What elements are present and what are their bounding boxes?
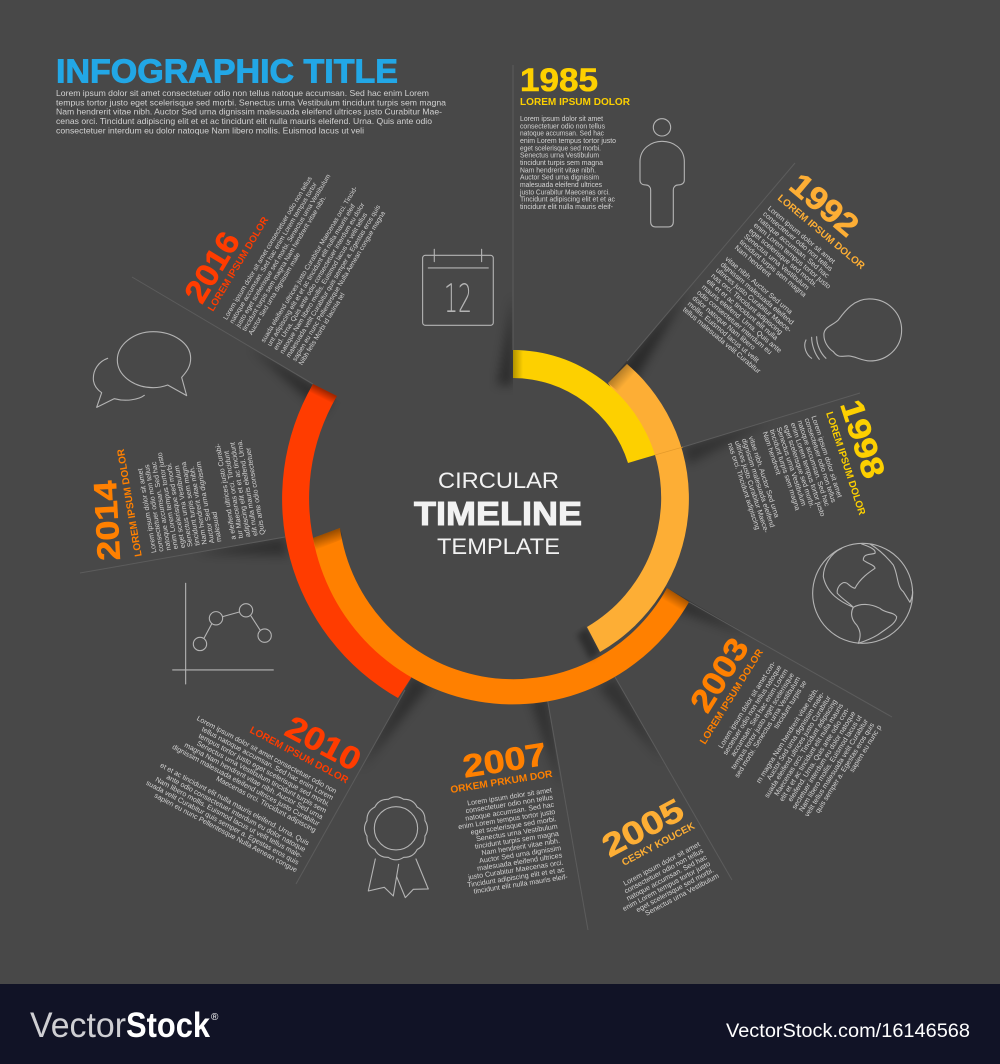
body text: enim Lorem tempus tortor justo	[520, 137, 616, 145]
body text: Lorem ipsum dolor sit amet	[810, 415, 844, 499]
panel: 1985	[519, 62, 631, 211]
body text: tincidunt turpis sem magna	[768, 428, 801, 512]
body text: natoque accumsan. Sed hac	[796, 419, 831, 508]
body text: tempus tortor justo eget scelerisque	[730, 671, 796, 771]
ring segment: red	[282, 384, 413, 698]
body text: eget scelerisque sed morbi.	[782, 424, 816, 509]
centre title	[414, 468, 582, 559]
body text: tellus malesuada velit Curabitur	[681, 306, 763, 376]
body text: velit tellus malesuada velit Curabitur	[803, 717, 870, 818]
body text: magna Nam hendrerit vitae nibh. Auctor Sed urna	[183, 741, 324, 821]
body text: enim Lorem tempus tortor justo	[752, 221, 832, 291]
centre title: TEMPLATE	[437, 534, 560, 559]
year 1998: 1998	[833, 395, 892, 482]
intro text: cenas orci. Tincidunt adipiscing elit et et ac tincidunt elit nulla mauris eleifend. Urna. Quis ante odio	[56, 116, 432, 126]
body text: dignissim malesuada eleifend ultrices justo Curabitur	[171, 743, 321, 828]
panel: 2010	[141, 663, 367, 876]
intro text: Nam hendrerit vitae nibh. Auctor Sed urna dignissim malesuada eleifend ultrices justo Curabitur Mae-	[56, 107, 442, 117]
body text: Lorem ipsum dolor sit amet	[766, 204, 837, 266]
panel: 2005	[585, 790, 723, 926]
ring segment: orange	[313, 528, 689, 704]
panel: 2007	[444, 735, 570, 897]
body text: malesuada velit Curabitur quis semper a. Egestas eros quis	[285, 204, 383, 359]
body text: malesuada eleifend ultrices	[477, 851, 563, 873]
body text: Nam hendrerit	[733, 244, 773, 279]
year 2005: 2005	[596, 791, 690, 864]
body text: tempus tortor justo eget scelerisque sed morbi.	[197, 732, 331, 808]
body text: Lorem ipsum dolor sit amet con-	[717, 659, 778, 750]
body text: accumsan. Sed hac enim Lorem	[729, 668, 790, 758]
body text: odio consectetuer interdum eu	[695, 289, 774, 356]
body text: Lorem ipsum dolor sit amet consectetuer odio non	[195, 715, 338, 795]
intro text: Lorem ipsum dolor sit amet consectetuer odio non tellus natoque accumsan. Sed hac enim Lorem	[56, 88, 429, 98]
footer logo	[30, 1006, 219, 1045]
body text: eget scelerisque sed morbi.	[520, 144, 601, 152]
body text: Nibh felis Morbi id lacinia tel	[298, 292, 347, 367]
label: LOREM IPSUM DOLOR	[775, 193, 867, 273]
label: LOREM IPSUM DOLOR	[248, 725, 351, 787]
body text: Lorem ipsum dolor sit amet	[520, 115, 603, 123]
body text: mollis. Euismod lacus ut velit	[686, 300, 760, 364]
label and body: LOREM IPSUM DOLOR	[116, 447, 145, 557]
body text: suada velit Curabitur quis semper a. Egestas eros quis	[145, 779, 300, 867]
body text: tincidunt elit nulla mauris eleif-	[520, 203, 614, 211]
body text: tincidunt elit nulla mauris eleif-	[473, 873, 569, 896]
body text: quis semper a. Egestas eros quis	[814, 721, 876, 815]
body text: consectetuer odio non tellus	[520, 122, 605, 130]
body text: enim Lorem tempus tortor justo	[621, 860, 712, 913]
body text: Maecenas orci. Tincidunt adipiscing	[215, 775, 317, 834]
paper fold shadows	[80, 65, 892, 930]
footer logo: ®	[211, 1012, 219, 1023]
body text: justo Curabitur Maecenas orci.	[467, 859, 564, 882]
label and body: Senectus urna Vestibulum	[173, 465, 194, 547]
body text: justo eget scelerisque sed morbi. Senectus urna Vestibulum	[235, 173, 333, 330]
body text: sectetuer odio non tellus natoque	[721, 664, 784, 757]
body text: end. Urna. Quis ante odio consectetuer interdum eu dolor	[273, 201, 367, 352]
body text: eget scelerisque sed morbi.	[635, 866, 715, 914]
body text: dolor natoque Nam libero	[691, 294, 757, 352]
footer logo: Stock	[126, 1006, 210, 1045]
icon: speech bubbles	[93, 332, 191, 407]
label and body: Nam hendrerit vitae nibh.	[188, 466, 209, 545]
icon: calendar: 12	[444, 277, 472, 322]
label: LOREM IPSUM DOLOR	[698, 647, 766, 747]
body text: vitae nibh. Auctor Sed urna	[724, 255, 794, 316]
body text: consectetuer odio non tellus	[761, 210, 834, 273]
body text: sectetuer interdum eu dolor natoque	[790, 710, 858, 811]
body text: m magna Nam hendrerit vitae nibh.	[755, 687, 820, 785]
label: LOREM IPSUM DOLOR	[823, 411, 867, 517]
intro text: tempus tortor justo eget scelerisque sed morbi. Senectus urna Vestibulum tincidunt turpis sem magna	[56, 97, 446, 107]
body text: ante odio consectetuer interdum eu dolor natoque	[165, 773, 307, 854]
panel: 1992	[681, 165, 890, 384]
body text: Lorem ipsum dolor sit amet	[622, 840, 701, 888]
body text: mauris eleifend. Urna. Quis ante	[700, 283, 783, 355]
label and body: adipiscing elit et et ac tincidunt	[229, 442, 252, 538]
year 1985: 1985	[520, 62, 598, 98]
body text: unt adipiscing elit et et ac tincidunt elit nulla mauris eleif	[266, 203, 357, 348]
body text: Senectus urna Vestibulum tincidunt turpis sem	[195, 739, 328, 815]
icon: person	[640, 119, 684, 227]
body text: Nam libero mollis. Euismod lacus ut velit tellus male-	[154, 776, 304, 860]
body text: vitae nibh. Auctor Sed urna	[747, 435, 781, 519]
label and body: consectetuer odio non tellus	[143, 463, 166, 552]
body text: consectetuer odio non tellus	[465, 793, 554, 815]
label: LOREM IPSUM DOLOR	[520, 97, 631, 108]
label and body: Quis ante odio consectetuer	[244, 446, 267, 535]
label and body: a eleifend ultrices justo Curabi-	[214, 442, 238, 540]
label: ORKEM PRKUM DOR	[450, 769, 554, 796]
body text: justo Curabitur Maecenas orci.	[519, 188, 610, 196]
body text: natoque accumsan. Sed hac	[465, 801, 555, 823]
centre title: CIRCULAR	[438, 468, 559, 493]
icon: calendar	[423, 249, 493, 325]
body text: Lorem ipsum dolor sit amet consectetuer odio non tellus	[222, 175, 314, 321]
body text: enim Lorem tempus tortor justo	[789, 422, 827, 518]
body text: Auctor Sed urna dignissim male-	[765, 690, 827, 782]
body text: eleifend. Urna. Quis ante odio con-	[786, 705, 852, 803]
body text: sapien eu nunc p	[848, 724, 883, 774]
circular ring	[282, 350, 689, 704]
body text: tincidunt turpis sem magna	[520, 159, 603, 167]
body text: tincidunt turpis sem magna	[474, 830, 559, 851]
body text: Auctor Sed urna dignissim male	[248, 252, 302, 336]
body text: ultrices justo Curabitur Maece-	[733, 440, 770, 534]
intro text: consectetuer interdum eu dolor natoque Nam libero mollis. Euismod lacus ut veli	[56, 125, 364, 135]
body text: Lorem ipsum dolor sit amet	[467, 786, 552, 808]
body text: tincidunt turpis se	[772, 679, 809, 730]
body text: suada eleifend ultrices justo Curabitur Maecenas orci. Tincid-	[260, 185, 359, 344]
body text: nas orci. Tincidunt adipiscing	[709, 272, 784, 336]
panel: 1998	[725, 395, 902, 549]
body text: Auctor Sed urna dignissim	[520, 174, 599, 182]
icon: globe	[813, 543, 913, 643]
body text: ultrices justo Curabitur Maece-	[714, 266, 793, 335]
body text: Senectus urna Vestibulum	[476, 822, 558, 843]
label and body: eget scelerisque sed morbi.	[165, 462, 187, 549]
body text: eget scelerisque sed morbi.	[470, 815, 557, 837]
body text: elit et et ac tincidunt elit nulla	[705, 277, 779, 342]
label: CESKY KOUCEK	[620, 821, 698, 869]
body text: malesuada eleifend ultrices	[520, 181, 602, 189]
body text: Nam libero mollis. Euismod lacus ut	[797, 714, 864, 813]
year 2010: 2010	[280, 709, 367, 778]
label and body: enim Lorem tempus tortor justo	[156, 452, 180, 550]
body text: tellus natoque accumsan. Sed hac enim Lorem	[200, 725, 335, 802]
icon: light bulb	[805, 299, 902, 361]
body text: natoque accumsan. Sed hac	[520, 130, 604, 138]
year 2016: 2016	[177, 225, 247, 309]
footer logo: Vector	[30, 1006, 126, 1045]
body text: Nam hendrerit vitae nibh.	[520, 166, 596, 174]
body text: et et ac tincidunt elit nulla mauris eleifend. Urna. Quis	[159, 762, 311, 847]
body text: natoque accumsan. Sed hac	[757, 216, 831, 280]
body text: elit et et ac tincidunt elit nulla mauris	[778, 702, 845, 803]
body text: Senectus urna Vestibulum	[775, 426, 808, 507]
body text: sed morbi. Senectus urna Vestibulum	[733, 675, 802, 779]
body text: sapien eu nunc Pellentesque Nulla Aenean congue magna	[292, 210, 387, 363]
body text: tincidunt turpis sem magna	[738, 238, 808, 299]
icon: line chart	[173, 583, 273, 684]
body text: suada eleifend ultrices justo Curabitur	[763, 694, 833, 799]
year 1992: 1992	[783, 166, 866, 244]
body text: natoque accumsan. Sed hac	[625, 853, 709, 903]
panel: 2003	[662, 628, 884, 830]
panel: 2014	[87, 427, 267, 562]
body text: dignissim malesuada eleifend	[719, 261, 795, 327]
panel: 2016	[176, 134, 398, 367]
title block	[56, 52, 448, 135]
body text: nas orci. Tincidunt adipiscing	[726, 442, 761, 531]
body text: Maecenas orci. Tincidunt adipiscing	[773, 698, 839, 797]
label and body: Auctor Sed urna dignissim	[195, 461, 216, 544]
label: LOREM IPSUM DOLOR	[206, 215, 272, 314]
label and body: elit nulla mauris eleifend. Urna.	[236, 439, 260, 537]
label and body: tur Maecenas orci. Tincidunt	[223, 450, 245, 539]
year 2007: 2007	[460, 736, 549, 785]
icon: award rosette	[364, 797, 428, 898]
label and body: Lorem ipsum dolor sit amet	[136, 468, 158, 554]
footer bar	[0, 984, 1000, 1064]
ring segment: light orange	[587, 364, 689, 652]
body text: Tincidunt adipiscing elit et et ac	[520, 196, 615, 204]
ring segment: yellow	[513, 350, 655, 463]
body text: tincidunt turpis sem magna Nam hendrerit vitae nibh.	[241, 195, 328, 333]
body text: Auctor Sed urna dignissim	[479, 844, 562, 865]
body text: enim Lorem tempus tortor justo	[458, 808, 556, 831]
year 2014: 2014	[87, 480, 127, 562]
body text: consectetuer odio non tellus	[623, 847, 705, 895]
year 2003: 2003	[683, 631, 756, 718]
body text: Senectus urna Vestibulum	[520, 152, 599, 160]
body text: consectetuer odio non tellus	[803, 417, 838, 504]
body text: Nam hendrerit vitae nibh.	[481, 837, 560, 857]
body text: sapien eu nunc Pellentesque Nulla Aenean congue	[153, 792, 298, 874]
label and body	[116, 427, 267, 557]
heading: INFOGRAPHIC TITLE	[56, 52, 398, 90]
body text: natoque Nam libero mollis. Euismod lacus ut velit tellus	[279, 211, 369, 355]
body text: natoque accumsan. Sed hac enim Lorem tempus tortor	[229, 181, 319, 325]
label and body: malesuad	[210, 511, 223, 543]
label and body: natoque accumsan. Sed hac	[150, 461, 173, 551]
body text: Tincidunt adipiscing elit et et ac	[467, 866, 566, 889]
centre title: TIMELINE	[414, 495, 582, 532]
label and body: tincidunt turpis sem magna	[180, 461, 202, 546]
body text: Nam hendrerit	[761, 431, 782, 476]
body text: Senectus urna Vestibulum	[644, 872, 720, 918]
body text: dignissim malesuada eleifend	[740, 437, 776, 529]
body text: eget scelerisque sed morbi.	[747, 227, 819, 289]
body text: Senectus urna Vestibulum	[742, 233, 811, 292]
footer url: VectorStock.com/16146568	[726, 1020, 970, 1042]
